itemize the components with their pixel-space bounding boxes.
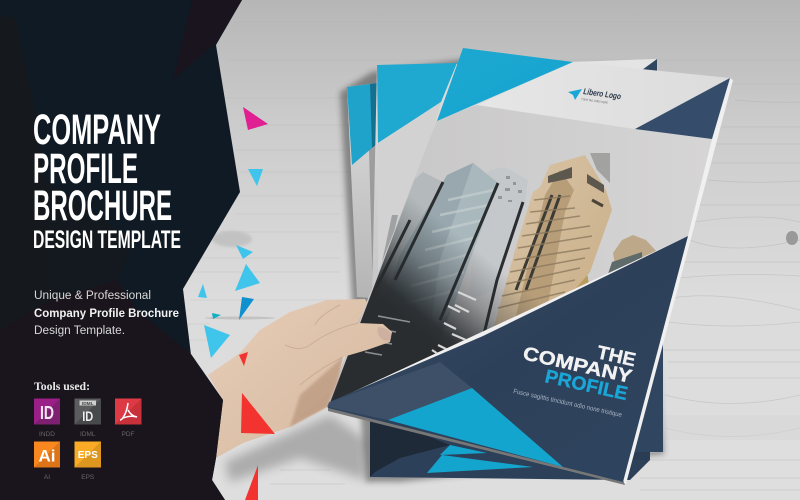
icon: EPS	[74, 442, 101, 481]
distant domed tower	[608, 235, 656, 274]
cyan bottom triangle	[388, 388, 563, 467]
cover page edge	[328, 78, 733, 484]
back brochure: third copy	[347, 83, 400, 300]
white window dashes	[432, 291, 476, 354]
icon: IDML: IDML	[82, 401, 94, 407]
icon: INDD: INDD	[39, 431, 55, 438]
icon: INDD: ID	[40, 403, 54, 423]
logo: YOUR TAG GOES HERE	[581, 97, 608, 105]
icon: AI: Ai	[38, 446, 56, 466]
lighter shade triangle	[327, 362, 472, 420]
back brochure: lower navy covers	[370, 320, 663, 480]
logo	[568, 86, 622, 105]
bottom page thickness	[328, 407, 625, 485]
cyan top triangle	[437, 48, 573, 121]
main glass tower	[392, 163, 498, 324]
purple top corner	[173, 0, 242, 80]
heading: PROFILE	[33, 145, 138, 193]
cover title	[513, 342, 638, 419]
tan tower	[493, 153, 612, 330]
black left facet	[0, 15, 50, 330]
gold foreground crane	[572, 275, 589, 290]
description text: Company Profile Brochure	[34, 308, 179, 320]
dark tower edges	[375, 182, 523, 338]
icon: EPS: EPS	[81, 474, 95, 481]
description text: Unique & Professional	[34, 290, 151, 302]
dark lower tone of buildings	[328, 202, 535, 408]
description text	[34, 290, 179, 337]
soft shadow under hand	[225, 415, 366, 482]
back brochure: second copy	[370, 59, 663, 470]
purple lower facet	[0, 280, 225, 500]
heading: BROCHURE	[33, 182, 172, 230]
hand holding brochure	[208, 299, 392, 458]
description text: Design Template.	[34, 325, 125, 337]
cover gray sky area	[327, 105, 712, 404]
pixel white tower	[496, 167, 528, 274]
thumb shade	[290, 357, 343, 427]
tools heading: Tools used:	[34, 381, 90, 393]
cover title: Fusce sagittis tincidunt odio none tristique	[513, 388, 623, 419]
cover title: THE	[595, 342, 638, 371]
icon: IDML	[74, 398, 101, 438]
left pale tower	[386, 172, 442, 264]
icon: INDD	[34, 398, 60, 438]
glass tower window stripes	[411, 189, 494, 299]
dark left panel	[0, 0, 242, 500]
icon: EPS: EPS	[78, 450, 98, 461]
heading: DESIGN TEMPLATE	[33, 226, 181, 254]
icon: IDML: ID	[82, 408, 93, 424]
building photograph	[328, 153, 656, 408]
heading	[33, 106, 181, 254]
icon: AI: AI	[44, 474, 50, 481]
icon: PDF: PDF	[122, 431, 135, 438]
white top band	[477, 62, 730, 129]
logo: Libero Logo	[583, 86, 622, 101]
tools used section	[34, 381, 142, 481]
icon: AI	[34, 442, 60, 481]
heading: COMPANY	[33, 106, 161, 154]
front brochure cover	[320, 48, 733, 485]
shadow under brochures	[340, 60, 664, 482]
navy lower triangle	[327, 236, 688, 482]
cover title: COMPANY	[521, 343, 634, 388]
icon: paper plane	[568, 89, 582, 100]
cover title: PROFILE	[543, 366, 629, 405]
thumb crease	[285, 305, 358, 385]
icon: IDML: IDML	[80, 431, 96, 438]
decorative triangles	[198, 107, 275, 500]
navy top right triangle	[635, 78, 730, 139]
thumbnail	[378, 327, 391, 341]
